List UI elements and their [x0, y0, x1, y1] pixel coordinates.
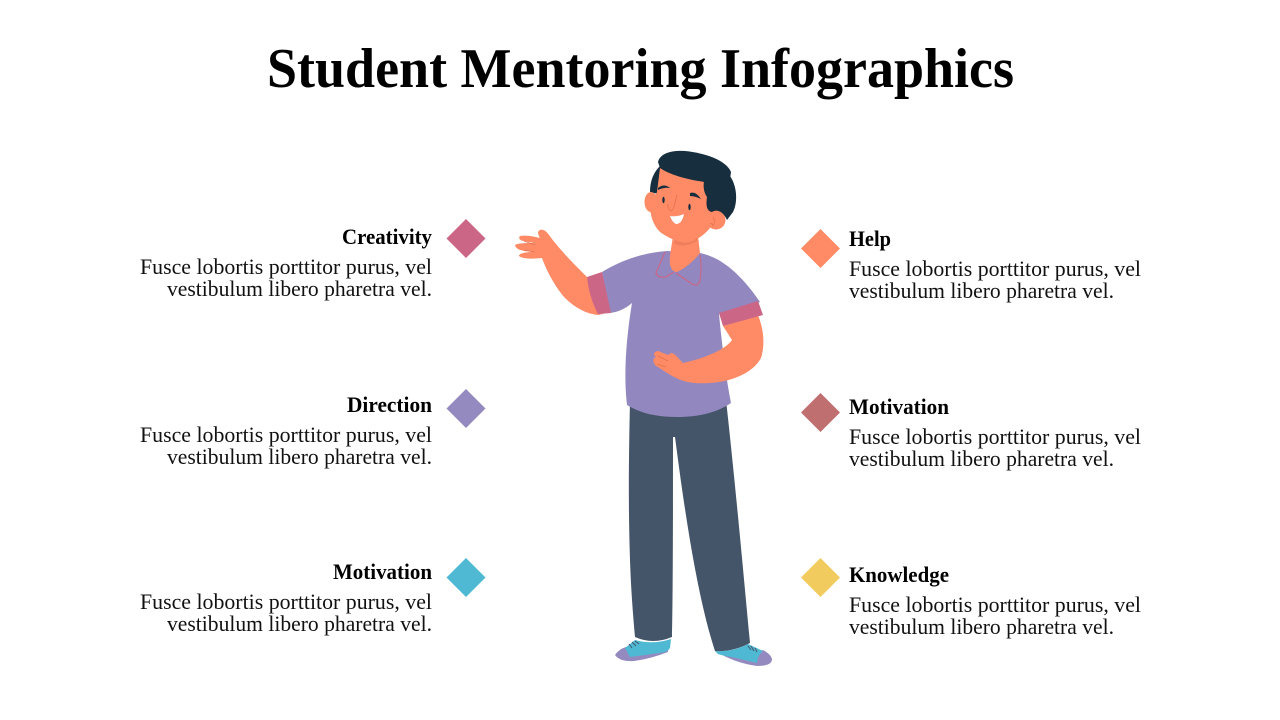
text: knowledge description: vestibulum libero pharetra vel.	[849, 614, 1114, 639]
panel: motivation right	[801, 393, 1141, 471]
shoe left	[615, 639, 671, 661]
illustration: student mentor figure	[515, 151, 772, 666]
panel: knowledge	[801, 558, 1141, 639]
mouth	[670, 214, 684, 224]
text: motivation right description: vestibulum libero pharetra vel.	[849, 446, 1114, 471]
text: creativity description: Fusce lobortis porttitor purus, vel	[140, 254, 432, 279]
icon: motivation diamond teal	[446, 558, 486, 597]
icon: creativity diamond	[446, 219, 486, 258]
ear left	[644, 192, 658, 212]
hair side	[704, 176, 736, 220]
panel: direction	[140, 389, 486, 469]
shirt	[602, 251, 760, 417]
text: knowledge description: Fusce lobortis porttitor purus, vel	[849, 592, 1141, 617]
text: motivation left description: vestibulum libero pharetra vel.	[167, 611, 432, 636]
left arm	[515, 230, 611, 315]
text: direction description: vestibulum libero pharetra vel.	[167, 444, 432, 469]
neck shadow	[674, 238, 697, 245]
shoe right	[715, 644, 772, 666]
icon: knowledge diamond	[801, 558, 840, 597]
nose	[668, 195, 677, 211]
text: knowledge description	[849, 592, 1141, 639]
left sleeve cuff	[587, 272, 611, 314]
eyes and brows	[658, 186, 701, 210]
text: help description: vestibulum libero pharetra vel.	[849, 278, 1114, 303]
text: direction description: Fusce lobortis porttitor purus, vel	[140, 422, 432, 447]
title: Student Mentoring Infographics	[267, 38, 1014, 100]
icon: help diamond	[801, 229, 840, 268]
ear detail	[710, 217, 714, 226]
collar	[656, 252, 701, 285]
text: help description	[849, 256, 1141, 303]
text: help description: Fusce lobortis porttitor purus, vel	[849, 256, 1141, 281]
heading: motivation right: Motivation	[849, 394, 949, 419]
right hand finger lines	[657, 356, 668, 367]
neck	[670, 236, 700, 272]
text: motivation right description	[849, 424, 1141, 471]
heading: help: Help	[849, 226, 891, 251]
text: direction description	[140, 422, 432, 469]
right sleeve cuff	[719, 301, 763, 326]
hair top	[658, 151, 731, 182]
trousers	[629, 400, 750, 651]
face	[650, 168, 722, 243]
heading: creativity: Creativity	[342, 224, 432, 249]
left arm finger lines	[524, 241, 535, 252]
text: motivation left description: Fusce lobortis porttitor purus, vel	[140, 589, 432, 614]
text: creativity description	[140, 254, 432, 301]
right arm	[653, 315, 763, 383]
icon: motivation diamond rose	[801, 393, 840, 432]
heading: knowledge: Knowledge	[849, 562, 949, 587]
panel: creativity	[140, 219, 486, 301]
hair back	[650, 166, 668, 194]
heading: direction: Direction	[347, 392, 432, 417]
ear right	[706, 210, 726, 230]
heading: motivation left: Motivation	[333, 559, 432, 584]
text: motivation right description: Fusce lobortis porttitor purus, vel	[849, 424, 1141, 449]
text: motivation left description	[140, 589, 432, 636]
panel: motivation left	[140, 558, 486, 636]
icon: direction diamond	[446, 389, 486, 428]
panel: help	[801, 226, 1141, 303]
text: creativity description: vestibulum libero pharetra vel.	[167, 276, 432, 301]
